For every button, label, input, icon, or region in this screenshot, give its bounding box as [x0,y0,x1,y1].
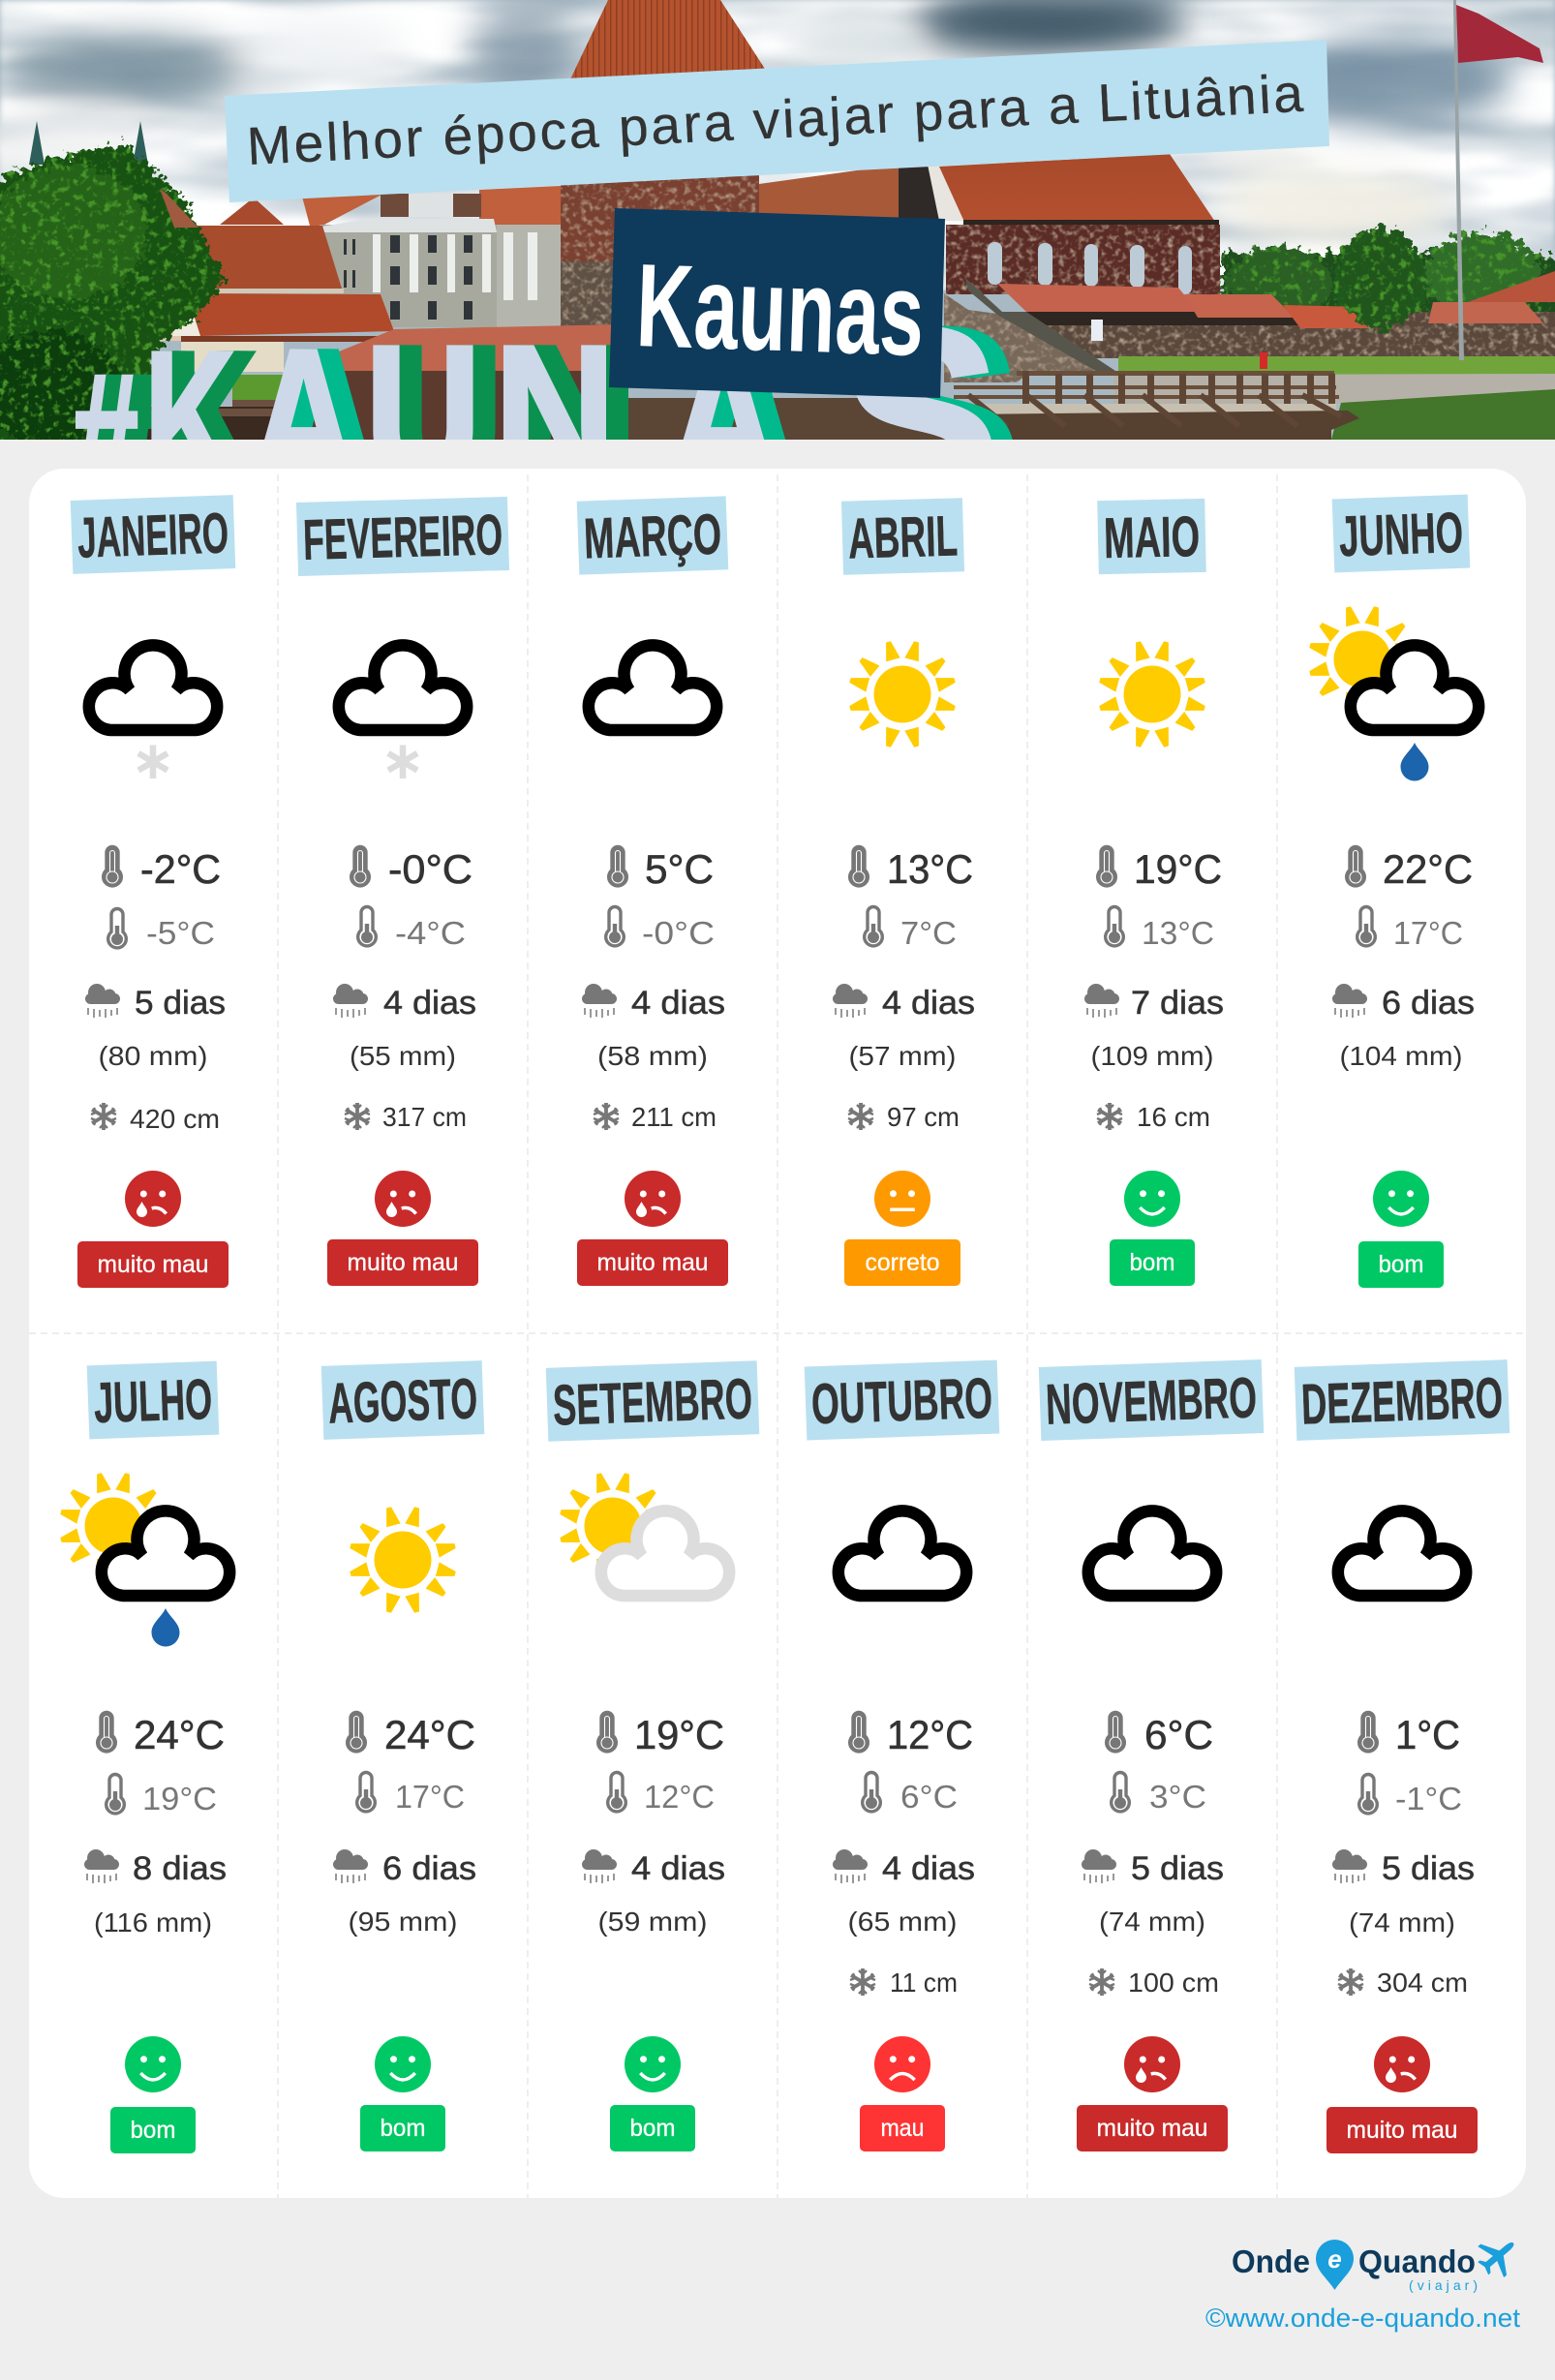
rating face [625,2036,681,2092]
max temperature [850,846,973,892]
max temperature: -0°C [388,846,473,892]
rainy days [333,1849,476,1887]
stone wall [944,293,1097,382]
snowfall: 100 cm [1128,1968,1219,1998]
min temperature [1112,1772,1206,1815]
month heading [1039,1359,1264,1441]
visitors [1260,352,1267,369]
max temperature [850,1712,973,1757]
rainy days: 6 dias [1382,985,1475,1022]
logo: Onde e Quando viajar: Quando [1358,2243,1476,2279]
min temperature [107,1774,217,1816]
rainy days: 4 dias [882,1850,975,1887]
logo: Onde e Quando viajar: e [1327,2244,1342,2273]
rating badge [860,2105,945,2151]
rainfall: (104 mm) [1340,1041,1462,1071]
low gallery wall [1007,312,1555,358]
logo: Onde e Quando viajar: Onde [1232,2243,1310,2279]
min temperature: 12°C [644,1779,715,1815]
rating badge: muito mau [347,1249,459,1276]
icon: map pin [1316,2240,1354,2290]
icon: airplane [1470,2228,1526,2284]
snowfall: 211 cm [631,1102,717,1132]
month heading: AGOSTO [327,1366,478,1436]
snowfall: 304 cm [1377,1968,1468,1998]
snowfall: 420 cm [130,1104,220,1134]
rainfall: (57 mm) [848,1041,957,1071]
rainy days [333,984,476,1022]
rating badge: mau [881,2115,924,2142]
rating face [1374,2036,1430,2092]
min temperature [108,908,215,951]
rainy days: 5 dias [1131,1850,1224,1887]
rating badge [610,2105,695,2151]
min temperature: 17°C [1393,915,1463,951]
rating face [125,2036,181,2092]
month heading [296,497,509,576]
month heading: SETEMBRO [552,1366,753,1438]
icon: sun [1098,640,1206,748]
header photo: Kaunas castle [0,0,1555,440]
rainy days [1082,1849,1224,1887]
cloudy sky [0,0,1510,242]
icon: cloud with snow [339,645,467,778]
panel: junho [1308,495,1479,1288]
month heading [805,1360,999,1440]
max temperature: 24°C [134,1712,225,1757]
rating badge: bom [629,2115,676,2142]
rating face [874,2036,930,2092]
max temperature: 24°C [384,1712,475,1757]
rating face [125,1171,181,1227]
#KAUNAS sign: S [840,277,1000,558]
rainy days: 4 dias [383,985,476,1022]
rainfall: (95 mm) [349,1907,457,1937]
rainfall: (59 mm) [598,1907,707,1937]
icon: sun, cloud and rain [1308,605,1479,780]
#KAUNAS sign: K [144,312,235,528]
panel: julho [59,1361,229,2153]
brick church [946,225,1220,294]
rating badge: bom [380,2115,426,2142]
rating badge [1326,2107,1478,2153]
mansard roof [381,194,481,217]
month heading [321,1360,484,1440]
max temperature [1098,846,1222,892]
rating face [1124,1171,1180,1227]
min temperature: -0°C [642,915,715,951]
max temperature [1359,1712,1460,1757]
rainy days: 4 dias [631,985,725,1022]
max temperature: 6°C [1144,1712,1213,1757]
min temperature [863,1772,958,1815]
rainy days: 4 dias [631,1850,725,1887]
striped lower roof [339,324,620,371]
snowfall [848,1102,960,1132]
icon: cloud [838,1510,966,1596]
month heading: MAIO [1103,504,1201,570]
snowfall [594,1102,717,1132]
gravel path [1113,374,1555,407]
rating face [375,2036,431,2092]
grey palace [320,225,497,327]
rainfall: (74 mm) [1349,1907,1455,1938]
rainy days [833,984,975,1022]
ground behind the sign [284,371,620,440]
month heading: ABRIL [847,503,959,571]
title banner: Melhor época para viajar para a Lituânia [245,63,1305,176]
spires behind the tree [29,121,45,165]
rating badge [577,1239,728,1286]
month heading [87,1361,219,1439]
snowfall [91,1103,220,1134]
logo: Onde e Quando viajar: (viajar) [1409,2277,1478,2293]
flagpole [1453,0,1464,360]
min temperature: 19°C [142,1781,217,1816]
rainfall: (55 mm) [350,1041,456,1071]
title banner [225,40,1329,202]
rainy days [1332,1849,1475,1887]
rainfall: (58 mm) [597,1041,708,1071]
#KAUNAS sign: A [668,310,779,526]
snowfall [1338,1968,1468,1998]
min temperature [865,906,957,951]
month heading: JANEIRO [76,501,229,570]
month heading: OUTUBRO [810,1366,993,1436]
rating badge [1110,1239,1195,1286]
left tree [0,143,225,445]
month heading [841,498,964,575]
snowfall: 97 cm [887,1102,960,1132]
max temperature [104,846,221,892]
rating face [1124,2036,1180,2092]
min temperature [1106,906,1214,951]
rainy days: 5 dias [135,985,226,1022]
snowfall: 16 cm [1137,1102,1210,1132]
min temperature [357,1772,465,1815]
month heading [577,496,728,575]
panel: agosto [321,1360,484,2151]
rating badge: bom [1129,1249,1175,1276]
min temperature: 3°C [1149,1779,1206,1815]
left roofs [220,201,284,225]
snowfall: 317 cm [382,1102,467,1132]
snowfall [850,1968,958,1998]
panel: novembro [1039,1359,1264,2151]
snowfall [1097,1102,1210,1132]
rating face [625,1171,681,1227]
striped roof [759,165,899,219]
icon: sun and grey cloud [559,1472,729,1596]
month heading [71,495,235,574]
month heading: JUNHO [1338,501,1464,568]
castle tower roof [570,0,772,79]
min temperature [1357,906,1463,951]
rating badge [77,1241,229,1288]
#KAUNAS sign: N [494,306,616,522]
rainy days [1084,984,1224,1022]
rating badge: muito mau [97,1251,209,1278]
panel: janeiro [71,495,235,1288]
max temperature: 1°C [1395,1712,1460,1757]
min temperature: 13°C [1142,915,1214,951]
month heading: FEVEREIRO [302,503,503,572]
rainy days [1332,984,1475,1022]
max temperature: 22°C [1383,846,1473,892]
rainy days [84,1849,227,1887]
min temperature: 17°C [395,1779,465,1815]
rating badge [1358,1241,1444,1288]
rainy days: 5 dias [1382,1850,1475,1887]
rainfall: (109 mm) [1090,1041,1214,1071]
min temperature: 6°C [900,1779,958,1815]
big tree right [1339,232,1420,329]
rating badge [327,1239,478,1286]
icon: cloud with snow [89,645,217,778]
rainy days: 7 dias [1131,985,1224,1022]
min temperature [606,906,715,951]
month heading [1097,499,1206,574]
rating badge [360,2105,445,2151]
rainy days [833,1849,975,1887]
rating badge: bom [1379,1251,1423,1278]
month heading [1332,495,1470,572]
icon: cloud [1338,1510,1466,1596]
min temperature: 7°C [900,915,957,951]
city label [609,208,945,398]
max temperature: 19°C [1134,846,1222,892]
rainy days [582,984,725,1022]
wooden bridge [954,371,1359,440]
staircase [965,278,1118,373]
max temperature [609,846,714,892]
snowfall [1089,1968,1219,1998]
icon: cloud [1088,1510,1216,1596]
rating badge [1077,2105,1228,2151]
rainy days: 8 dias [133,1850,227,1887]
month heading: NOVEMBRO [1045,1365,1258,1437]
rainy days: 6 dias [382,1850,476,1887]
rating badge: correto [866,1249,939,1276]
rating face [375,1171,431,1227]
max temperature: 5°C [645,846,714,892]
min temperature [608,1772,715,1815]
panel: setembro [546,1360,759,2151]
#KAUNAS sign: A [250,310,357,526]
rating badge: muito mau [1346,2117,1458,2144]
min temperature [358,906,466,951]
forest right [1220,223,1555,312]
lawn [1118,356,1555,376]
grass foreground [1331,389,1555,440]
rating badge: muito mau [596,1249,709,1276]
min temperature: -4°C [395,915,466,951]
rainfall: (116 mm) [94,1907,212,1938]
month heading [546,1360,759,1442]
max temperature: 12°C [887,1712,973,1757]
panel: dezembro [1295,1359,1509,2153]
rating badge [110,2107,196,2153]
church windows [988,242,1192,294]
rating face [874,1171,930,1227]
panel: março [577,496,728,1286]
max temperature: 19°C [634,1712,724,1757]
long gallery roofs [997,284,1198,312]
#KAUNAS sign [76,325,1013,440]
red roofs left [302,192,387,226]
min temperature: -5°C [146,915,215,951]
church roof [939,154,1217,225]
icon: sun [349,1506,457,1614]
website credit: ©www.onde-e-quando.net [1205,2304,1521,2333]
icon: sun [848,640,957,748]
#KAUNAS sign: U [365,306,481,522]
palace pilasters [373,232,537,300]
panel: outubro [805,1360,999,2151]
rating badge: bom [130,2117,176,2144]
rainfall: (65 mm) [848,1907,957,1937]
rainy days [85,984,226,1022]
min temperature: -1°C [1395,1781,1462,1816]
max temperature: 13°C [887,846,973,892]
rainfall: (74 mm) [1099,1907,1205,1937]
calendar card [29,469,1526,2198]
panel: abril [833,498,975,1286]
city label: Kaunas [634,239,926,381]
rainy days: 4 dias [882,985,975,1022]
logo: Onde e Quando viajar [1232,2228,1526,2293]
icon: cloud [589,645,717,730]
rating face [1373,1171,1429,1227]
icon: sun, cloud and rain [59,1472,229,1646]
snowfall: 11 cm [890,1968,958,1998]
rainfall: (80 mm) [99,1041,207,1071]
max temperature: -2°C [140,846,221,892]
rating badge [844,1239,960,1286]
max temperature [1107,1712,1213,1757]
month heading: JULHO [93,1367,213,1435]
brick tower [561,175,759,261]
snowfall [345,1102,467,1132]
min temperature [1359,1774,1462,1816]
palace windows [344,235,473,320]
panel: fevereiro [296,497,509,1286]
month heading: MARÇO [583,503,722,570]
max temperature [351,846,473,892]
panel: maio [1084,499,1224,1286]
#KAUNAS sign: # [72,334,138,550]
Lithuanian flag [1456,5,1543,63]
rainy days [582,1849,725,1887]
rating badge: muito mau [1096,2115,1208,2142]
